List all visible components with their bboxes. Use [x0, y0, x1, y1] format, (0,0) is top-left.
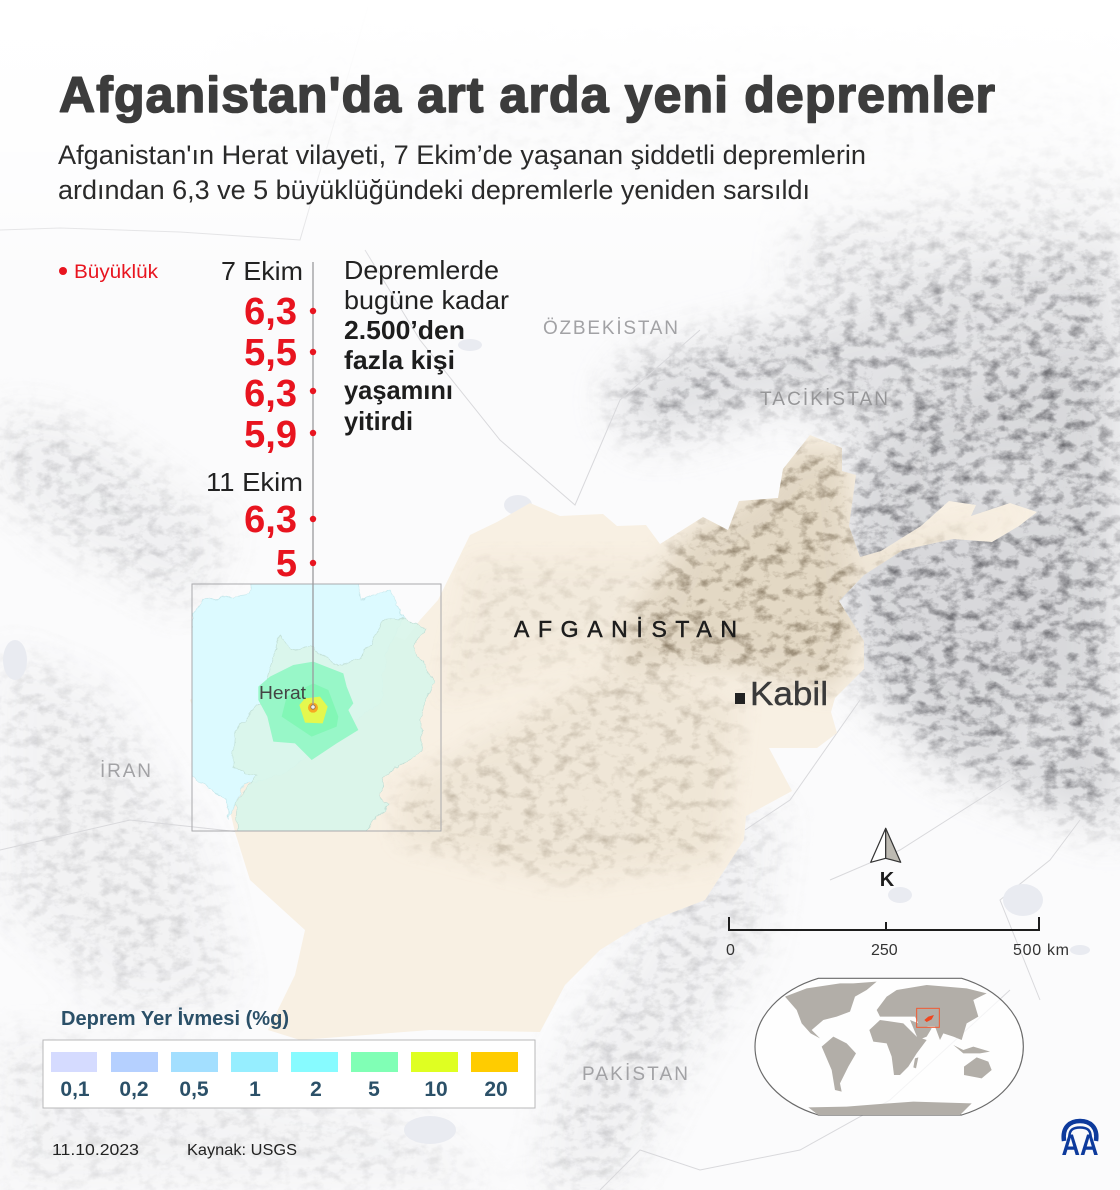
legend values: 1 [249, 1078, 261, 1101]
magnitudes: 5 [276, 543, 297, 585]
source: Kaynak: USGS [187, 1142, 297, 1159]
mint zone [232, 618, 435, 837]
icon: AA logo: AA [1062, 1129, 1098, 1162]
Afghanistan territory [190, 435, 1037, 1040]
death toll text: fazla kişi [344, 345, 455, 375]
magnitudes: 5,5 [244, 332, 297, 374]
magnitude key: Büyüklük [74, 262, 159, 283]
country labels: İRAN [100, 761, 151, 782]
cyan zone [188, 580, 403, 818]
death toll text: bugüne kadar [344, 285, 509, 315]
country labels: ÖZBEKİSTAN [543, 318, 678, 339]
magnitudes: 6,3 [244, 373, 297, 415]
inner green zone [282, 683, 338, 737]
magnitudes: 6,3 [244, 499, 297, 541]
legend values: 2 [310, 1078, 322, 1101]
legend values: 5 [368, 1078, 380, 1101]
scale bar: 500 km [1013, 942, 1069, 959]
country labels: TACİKİSTAN [760, 389, 888, 410]
death toll text: yaşamını [344, 375, 453, 405]
magnitude dots [310, 308, 316, 566]
magnitudes: 5,9 [244, 414, 297, 456]
death toll text: yitirdi [344, 406, 413, 436]
legend values: 10 [424, 1078, 448, 1101]
subtitle: Afganistan'ın Herat vilayeti, 7 Ekim’de yaşanan şiddetli depremlerin [58, 140, 866, 170]
overlay frame [192, 584, 441, 831]
label: Herat: Herat [259, 683, 306, 703]
north arrow [871, 828, 901, 891]
death toll text: Depremlerde [344, 255, 499, 285]
scale bar: 0 [726, 942, 735, 959]
subtitle: ardından 6,3 ve 5 büyüklüğündeki depremlerle yeniden sarsıldı [58, 175, 810, 205]
magnitudes: 6,3 [244, 291, 297, 333]
legend [43, 1040, 535, 1108]
death toll text: 2.500’den [344, 315, 465, 345]
north arrow: K [880, 869, 895, 891]
legend values: 0,2 [119, 1078, 149, 1101]
legend swatches [51, 1052, 518, 1072]
earthquake intensity overlay [188, 580, 435, 837]
scale bar [726, 917, 1069, 959]
label: Kabil: Kabil [750, 675, 828, 712]
country labels [100, 318, 888, 1085]
epicentre marker [311, 705, 315, 709]
magnitudes [244, 291, 297, 585]
country labels: PAKİSTAN [582, 1064, 688, 1085]
timeline [206, 256, 316, 707]
date: 11 Ekim: 11 Ekim [206, 467, 303, 497]
label: Afganistan: AFGANİSTAN [514, 616, 737, 642]
yellow zone [299, 697, 328, 723]
legend title: Deprem Yer İvmesi (%g) [61, 1007, 289, 1030]
legend values: 0,5 [179, 1078, 209, 1101]
legend values [60, 1078, 508, 1101]
scale bar: 250 [871, 942, 898, 959]
orange zone [308, 703, 318, 713]
title: Afganistan'da art arda yeni depremler [59, 67, 995, 123]
green zone [258, 662, 358, 760]
date: 11.10.2023 [52, 1142, 139, 1159]
subtitle [58, 140, 866, 205]
legend values: 20 [484, 1078, 508, 1101]
legend values: 0,1 [60, 1078, 90, 1101]
date: 7 Ekim: 7 Ekim [221, 256, 303, 286]
death toll text [344, 255, 509, 436]
locator world map [755, 978, 1023, 1115]
